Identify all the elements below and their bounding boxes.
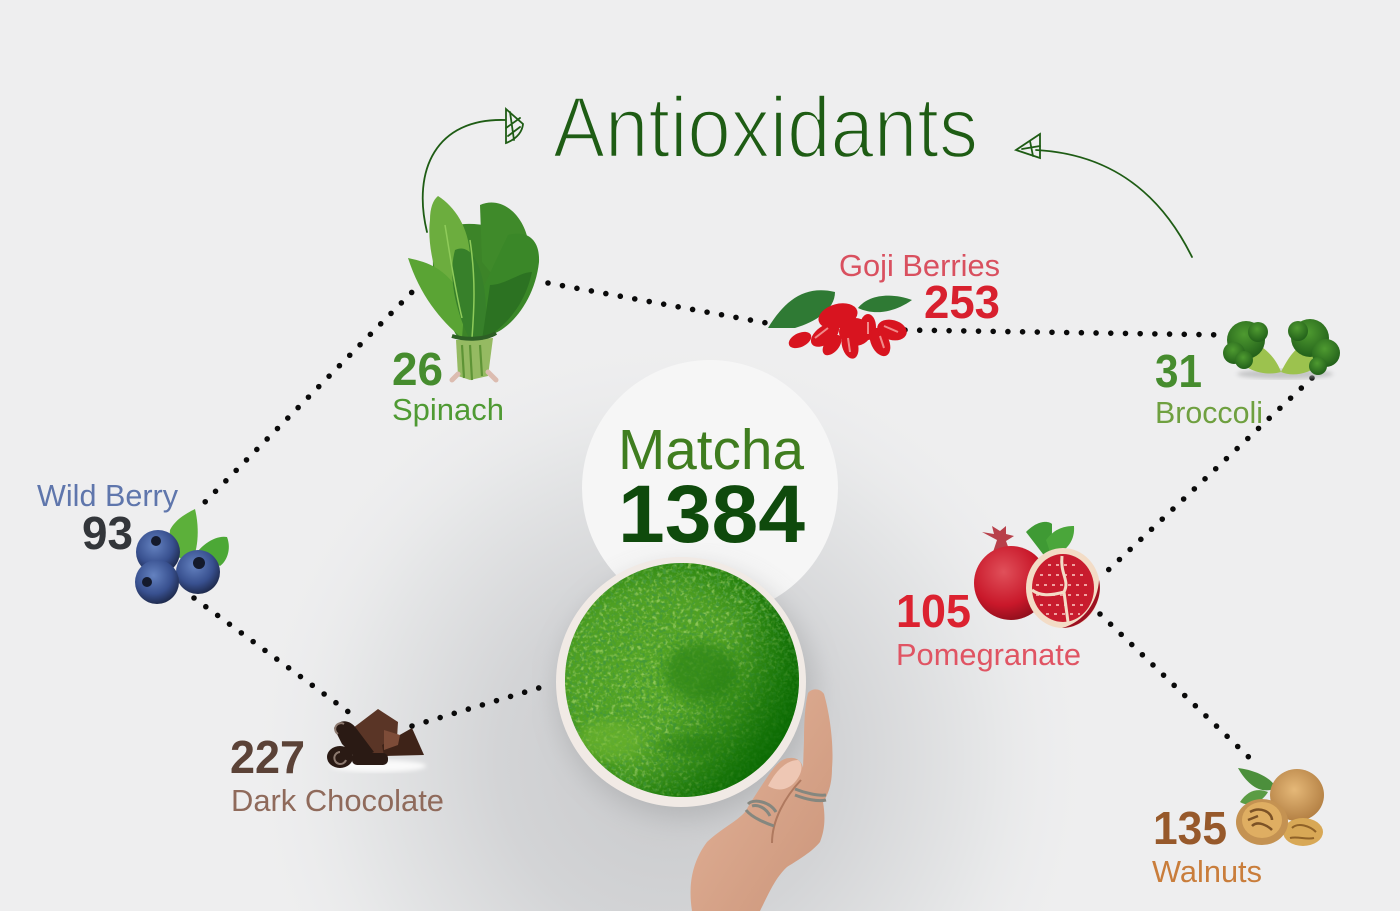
leaves: [1238, 768, 1276, 790]
matcha value circle: [582, 360, 838, 616]
whole walnut: [1270, 769, 1324, 821]
item: spinach: [408, 196, 539, 380]
dotted connector network: [194, 282, 1312, 766]
curls: [327, 721, 388, 768]
walnuts label: Walnuts: [1152, 854, 1262, 889]
chocolate blocks: [353, 709, 398, 757]
item: goji berries: [768, 290, 912, 361]
band: [452, 333, 496, 339]
stems: [452, 338, 496, 380]
half walnut: [1236, 799, 1288, 845]
stems: [1240, 342, 1320, 374]
berry calyx: [142, 536, 205, 587]
broccoli label: Broccoli: [1155, 395, 1263, 430]
hand holding cup: [691, 689, 833, 911]
leaves: [1026, 522, 1052, 558]
pomegranate value: 105: [896, 585, 971, 637]
florets: [1223, 319, 1340, 375]
leaves: [408, 196, 539, 340]
dark chocolate label: Dark Chocolate: [231, 783, 444, 818]
broccoli value: 31: [1155, 345, 1202, 397]
goji berries label: Goji Berries: [839, 248, 1000, 283]
berries: [786, 299, 909, 361]
arrow: broccoli to title: [1016, 134, 1192, 257]
walnut kernel: [1283, 818, 1323, 846]
title: Antioxidants: [553, 80, 978, 176]
wild berry value: 93: [82, 507, 133, 559]
item: pomegranate: [974, 522, 1100, 628]
shadow: [330, 760, 426, 772]
crown: [982, 526, 1014, 552]
pomegranate label: Pomegranate: [896, 637, 1081, 672]
walnuts value: 135: [1153, 802, 1227, 854]
spinach label: Spinach: [392, 392, 504, 427]
whole fruit: [974, 546, 1048, 620]
leaves: [768, 290, 835, 328]
matcha cup: [556, 557, 814, 816]
pith lines: [1032, 556, 1068, 622]
cut fruit: [1026, 548, 1100, 628]
wild berry label: Wild Berry: [37, 478, 178, 513]
shadow: [1237, 369, 1333, 379]
finger crease: [772, 780, 801, 843]
item: broccoli: [1223, 319, 1340, 379]
curl highlights: [334, 723, 346, 764]
item: dark chocolate: [327, 709, 426, 772]
rings: [746, 789, 826, 826]
matcha value: 1384: [618, 469, 805, 560]
thumb shading: [768, 760, 802, 789]
arrow: spinach to title: [423, 109, 523, 232]
matcha label: Matcha: [618, 418, 805, 481]
berry highlights: [815, 322, 898, 352]
item: walnuts: [1236, 768, 1324, 846]
dark chocolate value: 227: [230, 731, 305, 783]
blueberries: [136, 530, 180, 574]
spinach value: 26: [392, 343, 443, 395]
seed texture: [1036, 565, 1090, 614]
goji berries value: 253: [924, 276, 1000, 328]
item: wild berry: [135, 509, 229, 604]
leaves: [170, 509, 198, 565]
